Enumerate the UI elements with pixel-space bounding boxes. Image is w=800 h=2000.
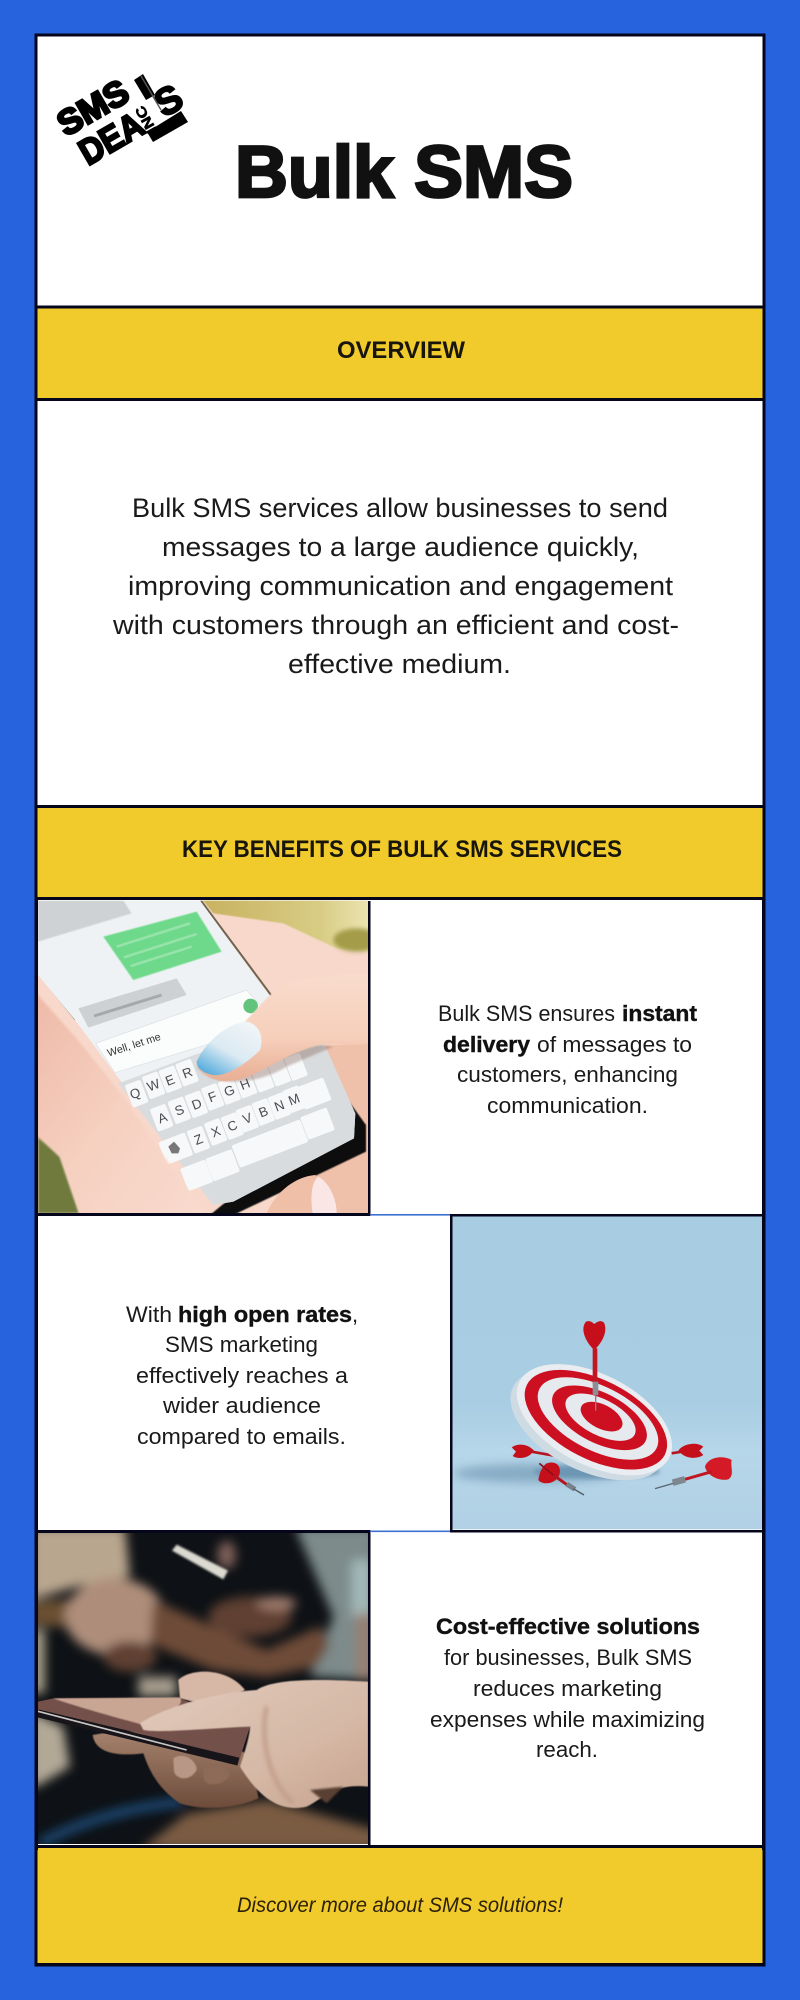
phone message text: Well, let me	[106, 1031, 162, 1060]
image: thumb typing on a smartphone: S	[173, 1102, 186, 1119]
back hand	[93, 1731, 258, 1808]
image: thumb typing on a smartphone: W	[145, 1076, 162, 1094]
lower fingertip	[267, 1175, 317, 1213]
typing finger shadow	[196, 1044, 332, 1083]
footer call to action: Discover more about SMS solutions!	[237, 1894, 563, 1917]
panel: benefit text high open rates: high open rates	[178, 1302, 352, 1327]
panel: benefit text instant delivery	[438, 1001, 698, 1118]
text block: overview: with customers through an efficient and cost-	[112, 610, 679, 640]
text block: overview: improving communication and engagement	[128, 571, 674, 601]
image: thumb typing on a smartphone	[33, 897, 380, 1217]
icon: SMS Deals Inc logo: S	[148, 77, 190, 126]
front hand	[140, 1680, 368, 1808]
panel: key benefits heading	[36, 806, 764, 898]
icon: SMS Deals Inc logo	[50, 72, 190, 173]
image: thumb typing on a smartphone: V	[241, 1110, 254, 1127]
board	[510, 1364, 672, 1480]
panel: benefit text high open rates: With	[126, 1302, 172, 1327]
panel: footer	[36, 1846, 764, 1964]
panel: header	[50, 72, 573, 213]
palm and phone screen	[38, 1698, 250, 1763]
panel: benefit text high open rates	[126, 1302, 358, 1449]
panel: benefit text instant delivery: of messages to	[537, 1032, 692, 1057]
text block: overview: Bulk SMS services allow businesses to send	[132, 493, 668, 523]
fingernail	[197, 1022, 261, 1075]
image: thumb typing on a smartphone: G	[222, 1082, 237, 1100]
text block: overview	[112, 493, 679, 679]
image: dartboard with darts	[452, 1216, 763, 1529]
title: Bulk SMS	[235, 132, 573, 213]
phone edge	[38, 1711, 238, 1762]
grid lines	[35, 900, 765, 1850]
image: thumb typing on a smartphone: M	[286, 1090, 302, 1108]
panel: benefit text high open rates: effectively reaches a	[136, 1363, 349, 1388]
phone keyboard	[125, 1053, 335, 1191]
panel: benefit text high open rates: SMS marketing	[165, 1332, 318, 1357]
image: thumb typing on a smartphone: E	[163, 1072, 177, 1089]
panel: benefit text high open rates: compared to emails.	[137, 1424, 346, 1449]
image: thumb typing on a smartphone: X	[209, 1123, 223, 1140]
image: thumb typing on a smartphone: H	[238, 1075, 252, 1093]
panel: benefit text cost-effective	[430, 1614, 705, 1762]
dart right behind board	[672, 1444, 703, 1458]
image: thumb typing on a smartphone: A	[156, 1109, 169, 1126]
image: thumb typing on a smartphone: R	[180, 1064, 195, 1082]
panel: benefit text cost-effective: reduces marketing	[473, 1676, 662, 1701]
image: thumb typing on a smartphone: Z	[192, 1131, 205, 1148]
panel: benefit text instant delivery: communication.	[487, 1093, 648, 1118]
dart in bullseye	[583, 1321, 605, 1411]
image: thumb typing on a smartphone: C	[225, 1117, 240, 1135]
panel: benefit text instant delivery: Bulk SMS ensures	[438, 1001, 615, 1026]
panel: benefit text instant delivery: instant	[622, 1001, 698, 1026]
text block: overview: messages to a large audience quickly,	[162, 532, 639, 562]
panel: overview heading	[36, 307, 764, 400]
image: thumb typing on a smartphone: B	[257, 1103, 270, 1120]
image: thumb typing on a smartphone: N	[272, 1097, 287, 1115]
typing finger	[196, 994, 368, 1082]
heading: key benefits: KEY BENEFITS OF BULK SMS SERVICES	[182, 836, 622, 863]
image: thumb typing on a smartphone: F	[206, 1088, 219, 1105]
panel: benefit text cost-effective: for businesses, Bulk SMS	[444, 1645, 692, 1670]
text block: overview: effective medium.	[288, 649, 511, 679]
image: thumb typing on a smartphone: Q	[128, 1085, 143, 1102]
image: thumb typing on a smartphone: D	[190, 1095, 204, 1113]
dart left behind board	[512, 1444, 554, 1458]
dart front right	[655, 1457, 732, 1489]
icon: SMS Deals Inc logo: DEA	[72, 103, 151, 173]
panel: benefit text instant delivery: delivery	[443, 1032, 531, 1057]
panel: benefit text instant delivery: customers, enhancing	[457, 1062, 678, 1087]
panel: benefit text cost-effective: Cost-effective solutions	[436, 1614, 700, 1639]
icon: SMS Deals Inc logo: INC	[132, 103, 160, 136]
panel: benefit text cost-effective: expenses while maximizing	[430, 1707, 705, 1732]
dart front left	[538, 1462, 584, 1495]
panel: benefit text cost-effective: reach.	[536, 1737, 598, 1762]
left palm over phone	[38, 994, 190, 1213]
panel: benefit text high open rates: ,	[352, 1302, 358, 1327]
panel: benefit text high open rates: wider audience	[162, 1393, 321, 1418]
heading: overview: OVERVIEW	[337, 337, 465, 364]
icon: SMS Deals Inc logo: SMS	[50, 72, 136, 144]
image: hands holding smartphones	[30, 1527, 377, 1850]
